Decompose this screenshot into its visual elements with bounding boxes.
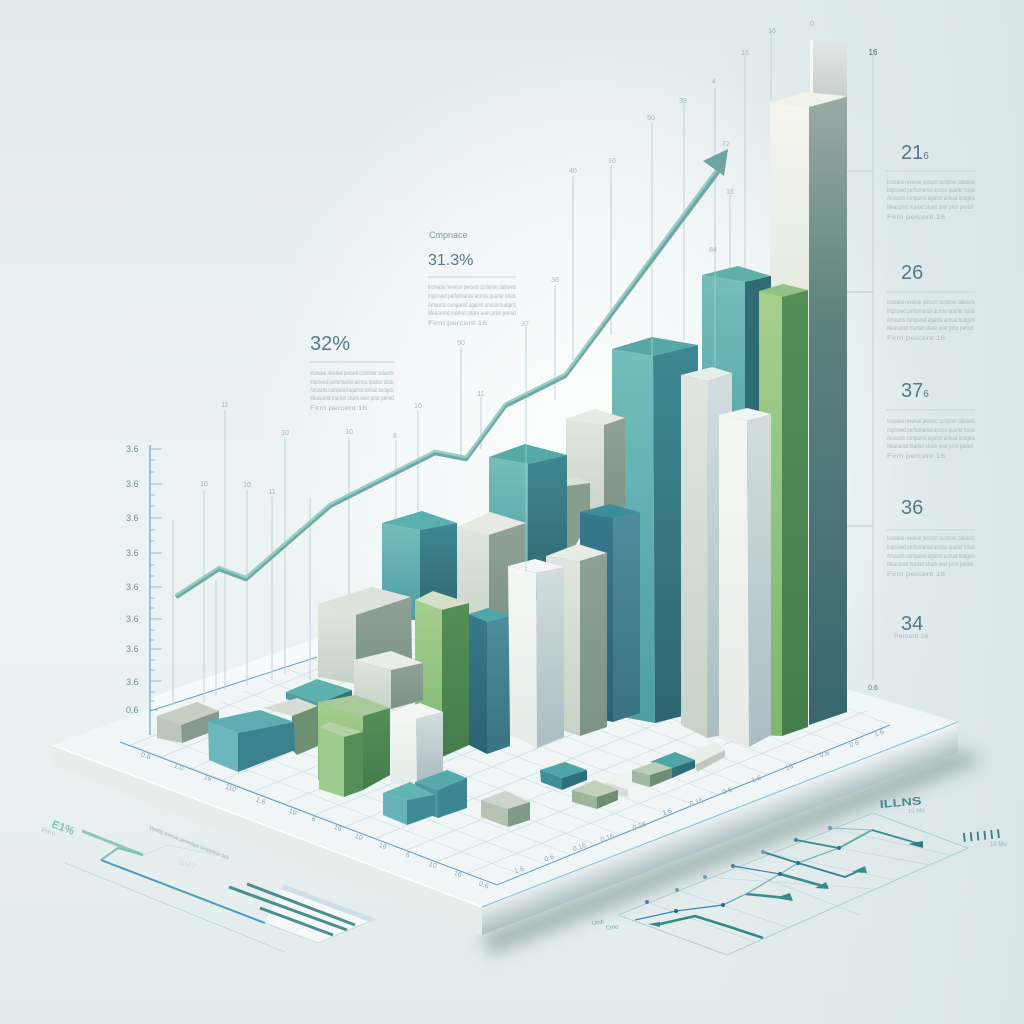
bar: sage middle left (457, 512, 526, 640)
front-left axis labels: 1.0 (173, 763, 184, 773)
front-left axis labels: 1.6 (255, 797, 266, 807)
callout: 32% (310, 333, 394, 412)
bar: white front middle (508, 559, 564, 748)
front-left axis labels: 6 (404, 852, 411, 860)
y axis with ticks and labels: 3.6 (126, 644, 139, 654)
front-right axis labels (514, 729, 885, 876)
mini chart bottom right: 10 Mo (908, 808, 925, 815)
vertical guide lines with labels: 11 (268, 489, 276, 496)
platform (52, 650, 958, 935)
vertical guide lines with labels: 10 (281, 430, 289, 437)
callout: 32%: Measured market share over prior period (310, 396, 394, 402)
callout: 32%: Firm percent 16 (310, 406, 368, 412)
right column block: 37: Improved performance across quarter totals (887, 428, 975, 434)
right column block: 36: Amounts compared against annual budgets (887, 554, 975, 560)
y axis with ticks and labels (126, 444, 162, 735)
right column block: 34: 34 (901, 613, 923, 635)
front-right axis labels: 0.16 (572, 842, 587, 853)
bar: small sage cube (354, 651, 423, 709)
back wall base (150, 637, 330, 712)
front-left axis labels: 110 (224, 783, 237, 794)
front-left axis labels: 10 (354, 833, 363, 842)
floor axes (120, 657, 890, 885)
callout: 31.3%: Cmpnace (429, 230, 468, 240)
callout: 32%: 32% (310, 333, 350, 355)
right column block: 36: 36 (901, 497, 923, 519)
bar: grey behind teal block (263, 698, 318, 755)
bar: teal low block (208, 710, 295, 772)
front-right axis labels: 0.16 (632, 821, 647, 832)
mini chart bottom left: GMT (177, 857, 197, 871)
right column block: 26 (886, 262, 975, 342)
vertical guide lines with labels: 39 (679, 98, 687, 105)
right column block: 21 (886, 142, 975, 221)
mini chart bottom right: ILLNS (879, 795, 922, 811)
bar: large sage block (318, 587, 412, 684)
bar: sage back (566, 409, 625, 530)
bar: tall white front 2 (719, 408, 771, 747)
platform drop shadow (482, 750, 985, 955)
front-right axis labels: 0.6 (849, 740, 860, 750)
front-right axis labels: 16 (785, 763, 794, 772)
callout: 31.3%: Increase revenue percent customer datasets (428, 285, 516, 291)
front-left axis labels: 16 (378, 842, 387, 851)
bar: teal cube left (383, 782, 435, 825)
callout: 31.3%: Measured market share over prior period (428, 311, 516, 317)
bar: teal middle (489, 444, 567, 600)
right column block: 36: Firm percent 16 (887, 572, 946, 578)
right column block: 37: Amounts compared against annual budgets (887, 436, 975, 442)
bar: small sage far tile (632, 762, 672, 787)
bar: dark teal left (469, 608, 510, 754)
right column block: 26: Improved performance across quarter totals (887, 309, 975, 315)
front-right axis labels: 1.6 (514, 866, 525, 876)
right column block: 37: Increase revenue percent customer datasets (887, 419, 975, 425)
right column block: 37: Measured market share over prior period (887, 444, 973, 450)
right column block: 36 (886, 497, 975, 578)
y axis with ticks and labels: 3.6 (126, 479, 139, 489)
leader lines to right column (847, 171, 873, 526)
right column block: 26: Increase revenue percent customer datasets (887, 300, 975, 306)
right column block: 34 (894, 613, 929, 640)
callout: 31.3%: 31.3% (428, 252, 473, 269)
mini chart bottom left: Pmo (40, 827, 56, 838)
right column block: 37: 376 (901, 380, 929, 402)
vertical guide lines with labels: 8 (393, 433, 397, 440)
vertical guide lines with labels: 37 (521, 321, 529, 328)
bar: small grey cube (481, 791, 530, 827)
right column block: 21: Increase revenue percent customer datasets (887, 180, 975, 186)
bar: teal left cube (382, 511, 457, 620)
bar: small teal tile (540, 762, 587, 790)
guide overlays on bars (526, 266, 715, 572)
vertical guide lines with labels: 16 (869, 48, 878, 57)
callout: 31.3%: Improved performance across quarter totals (428, 294, 516, 300)
front-left axis labels: 16 (203, 774, 212, 783)
bar: small green front (319, 722, 363, 797)
vertical guide lines with labels: 50 (647, 115, 655, 122)
vertical guide lines with labels: 10 (414, 403, 422, 410)
vertical guide lines with labels: 4 (712, 79, 716, 86)
right column block: 36: Improved performance across quarter totals (887, 545, 975, 551)
arrow tip label: 72 (722, 141, 730, 148)
bar: small sage behind (567, 476, 590, 560)
bar: teal upper right (702, 266, 771, 520)
vertical guide lines with labels: 16 (741, 50, 749, 57)
bar: green tall left (415, 591, 469, 757)
y axis with ticks and labels: 3.6 (126, 548, 139, 558)
y axis with ticks and labels: 3.6 (126, 582, 139, 592)
front-left axis labels: 16 (453, 870, 462, 879)
bar: dark teal middle (580, 504, 640, 722)
bar: flat teal back (286, 679, 352, 710)
vertical guide lines with labels: 11 (221, 402, 229, 409)
right column block: 26: Firm percent 16 (887, 336, 946, 342)
front-right axis labels: 1.6 (662, 808, 673, 818)
vertical guide lines with labels: 84 (709, 247, 717, 254)
right column block: 26: Measured market share over prior period (887, 326, 973, 332)
mini chart bottom right: Uniti (591, 919, 604, 927)
bar: tall white front 1 (681, 367, 732, 738)
right column block: 21: Amounts compared against annual budgets (887, 196, 975, 202)
bar: large green block (318, 695, 390, 790)
front-right axis labels: 0.6 (722, 787, 733, 797)
bar: low grey far left (157, 702, 219, 743)
bar: tall teal center (612, 337, 698, 723)
vertical guide lines with labels: 10 (243, 482, 251, 489)
front-right axis labels: 0.16 (600, 833, 615, 844)
mini chart bottom right: IIIIII (962, 826, 1001, 845)
bar: white tile (605, 772, 645, 797)
bar: far right white tile (680, 742, 725, 772)
front-left axis labels: 0.6 (478, 881, 489, 891)
y axis with ticks and labels: 3.6 (126, 614, 139, 624)
front-left axis labels: 10 (288, 808, 297, 817)
callout: 31.3%: Amounts compared against annual budgets (428, 303, 516, 309)
right column block: 21: Measured market share over prior period (887, 205, 973, 211)
floor grid (130, 600, 890, 885)
vertical guide lines with labels: 16 (726, 189, 734, 196)
y axis with ticks and labels: 3.6 (126, 444, 139, 454)
callout: 31.3% (428, 230, 516, 327)
front-right axis labels: 1.6 (874, 729, 885, 739)
right column block: 36: Increase revenue percent customer datasets (887, 536, 975, 542)
front-right axis labels: 0.16 (689, 797, 704, 808)
front-left axis labels: 16 (333, 824, 342, 833)
bar: tall green right (759, 284, 808, 736)
mini chart bottom right (591, 795, 1007, 955)
y axis with ticks and labels: 3.6 (126, 677, 139, 687)
right column block: 37 (886, 380, 975, 460)
mini chart bottom right: Cmo (605, 924, 619, 932)
vertical guide lines with labels: 16 (768, 28, 776, 35)
front-left axis labels: 0.6 (140, 752, 151, 762)
mini chart bottom left: Monthly revenue percentage comparison data (148, 825, 230, 862)
callout: 32%: Improved performance across quarter totals (310, 380, 394, 386)
y axis with ticks and labels: 3.6 (126, 513, 139, 523)
right column block: 21: Firm percent 16 (887, 215, 946, 221)
front-left axis labels (140, 752, 489, 891)
callout: 32%: Increase revenue percent customer datasets (310, 371, 394, 377)
vertical guide lines with labels: 10 (200, 481, 208, 488)
bar: tall white and teal column (770, 40, 847, 725)
callout: 32%: Amounts compared against annual budgets (310, 388, 394, 394)
bar: small sage tile (572, 780, 618, 809)
vertical guide lines with labels: 36 (551, 277, 559, 284)
right column block: 36: Measured market share over prior period (887, 562, 973, 568)
front-right axis labels: 1.6 (751, 775, 762, 785)
bar: small teal far tile (650, 752, 695, 778)
bar: sage front middle (546, 544, 607, 736)
vertical guide lines with labels: 10 (608, 158, 616, 165)
right column block: 21: Improved performance across quarter totals (887, 188, 975, 194)
mini chart bottom left (40, 819, 375, 952)
callout: 31.3%: Firm percent 16 (428, 321, 488, 327)
right column block: 37: Firm percent 16 (887, 454, 946, 460)
mini chart bottom right: 10 Mo (990, 842, 1007, 848)
right column block: 21: 216 (901, 142, 929, 164)
vertical guide lines with labels: 0 (810, 21, 814, 28)
right column block: 26: 26 (901, 262, 923, 284)
trend arrow (176, 149, 728, 597)
vertical guide lines with labels: 10 (345, 429, 353, 436)
vertical guide lines with labels: 0.6 (868, 685, 878, 692)
mini chart bottom left: E1% (50, 819, 76, 838)
y axis with ticks and labels: 0.6 (126, 705, 139, 715)
bar: white short (391, 703, 443, 785)
right column block: 34: Percent 16 (894, 634, 929, 640)
vertical guide lines with labels: 11 (477, 391, 485, 398)
front-right axis labels: 0.6 (819, 750, 830, 760)
vertical guide lines with labels: 40 (569, 168, 577, 175)
right column block: 26: Amounts compared against annual budgets (887, 318, 975, 324)
front-right axis labels: 0.6 (544, 854, 555, 864)
bar: teal cube right (415, 770, 467, 818)
front-left axis labels: 6 (310, 816, 317, 824)
vertical guide lines with labels (173, 21, 878, 705)
vertical guide lines with labels: 50 (457, 340, 465, 347)
front-left axis labels: 10 (428, 861, 437, 870)
